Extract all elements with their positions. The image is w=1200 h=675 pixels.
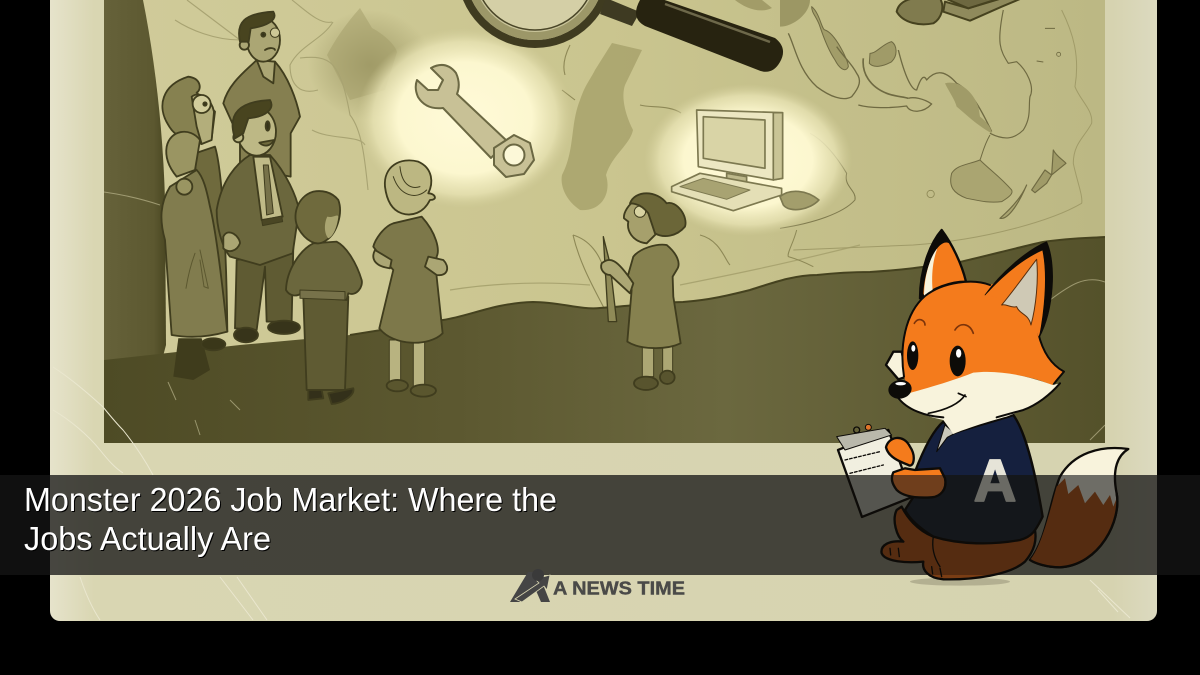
shadow (910, 578, 1010, 586)
hand and arm (886, 438, 945, 498)
face outline (902, 282, 1064, 384)
poster wear marks (53, 367, 1130, 620)
magnifying glass (461, 0, 783, 72)
lower body and feet (881, 507, 1036, 579)
muzzle fill (897, 372, 1060, 434)
title: Jobs Actually Are (24, 520, 271, 557)
people group (161, 12, 447, 404)
nose (887, 378, 913, 401)
chin outline (897, 383, 1060, 417)
logo mark (510, 569, 550, 602)
glow behind computer (650, 88, 847, 232)
desk objects top right (897, 0, 1022, 24)
tall man (223, 12, 300, 177)
logo: A News Time (510, 569, 685, 602)
right eye (950, 346, 966, 376)
face fill (902, 270, 1064, 393)
icon: computer (672, 110, 819, 211)
monitor (697, 110, 783, 184)
title (24, 481, 557, 557)
older woman (162, 77, 227, 337)
head (886, 230, 1064, 434)
woman facing map (373, 160, 447, 397)
fox mascot (837, 230, 1128, 586)
jacket (905, 415, 1043, 543)
map landmasses right (780, 0, 1092, 267)
left ear (920, 230, 966, 298)
logo wordmark: A NEWS TIME (553, 578, 685, 598)
girl with pointer (601, 193, 686, 390)
floor edge line (350, 237, 1105, 335)
right ear (985, 242, 1053, 337)
wall map background (143, 0, 1105, 354)
floor (104, 237, 1105, 443)
boy (286, 191, 362, 404)
notepad (837, 424, 912, 517)
glow behind wrench (364, 34, 566, 202)
left eye (907, 341, 918, 370)
map landmasses centre and left (175, 0, 860, 316)
mouse (780, 191, 819, 210)
tail (1030, 448, 1128, 567)
coat woman (161, 132, 227, 380)
eyebrows (914, 320, 973, 333)
white cheek tuft (886, 352, 907, 379)
smile (928, 393, 966, 413)
curtain (104, 0, 166, 360)
poster illustration (104, 0, 1105, 443)
keyboard (672, 173, 782, 211)
title: Monster 2026 Job Market: Where the (24, 481, 557, 518)
icon: wrench (416, 65, 534, 177)
eye highlights (911, 345, 961, 358)
jacket letter A: A (974, 447, 1016, 514)
floor scratches and specks (104, 192, 1105, 440)
title banner (0, 475, 1200, 575)
centre man (217, 100, 300, 342)
